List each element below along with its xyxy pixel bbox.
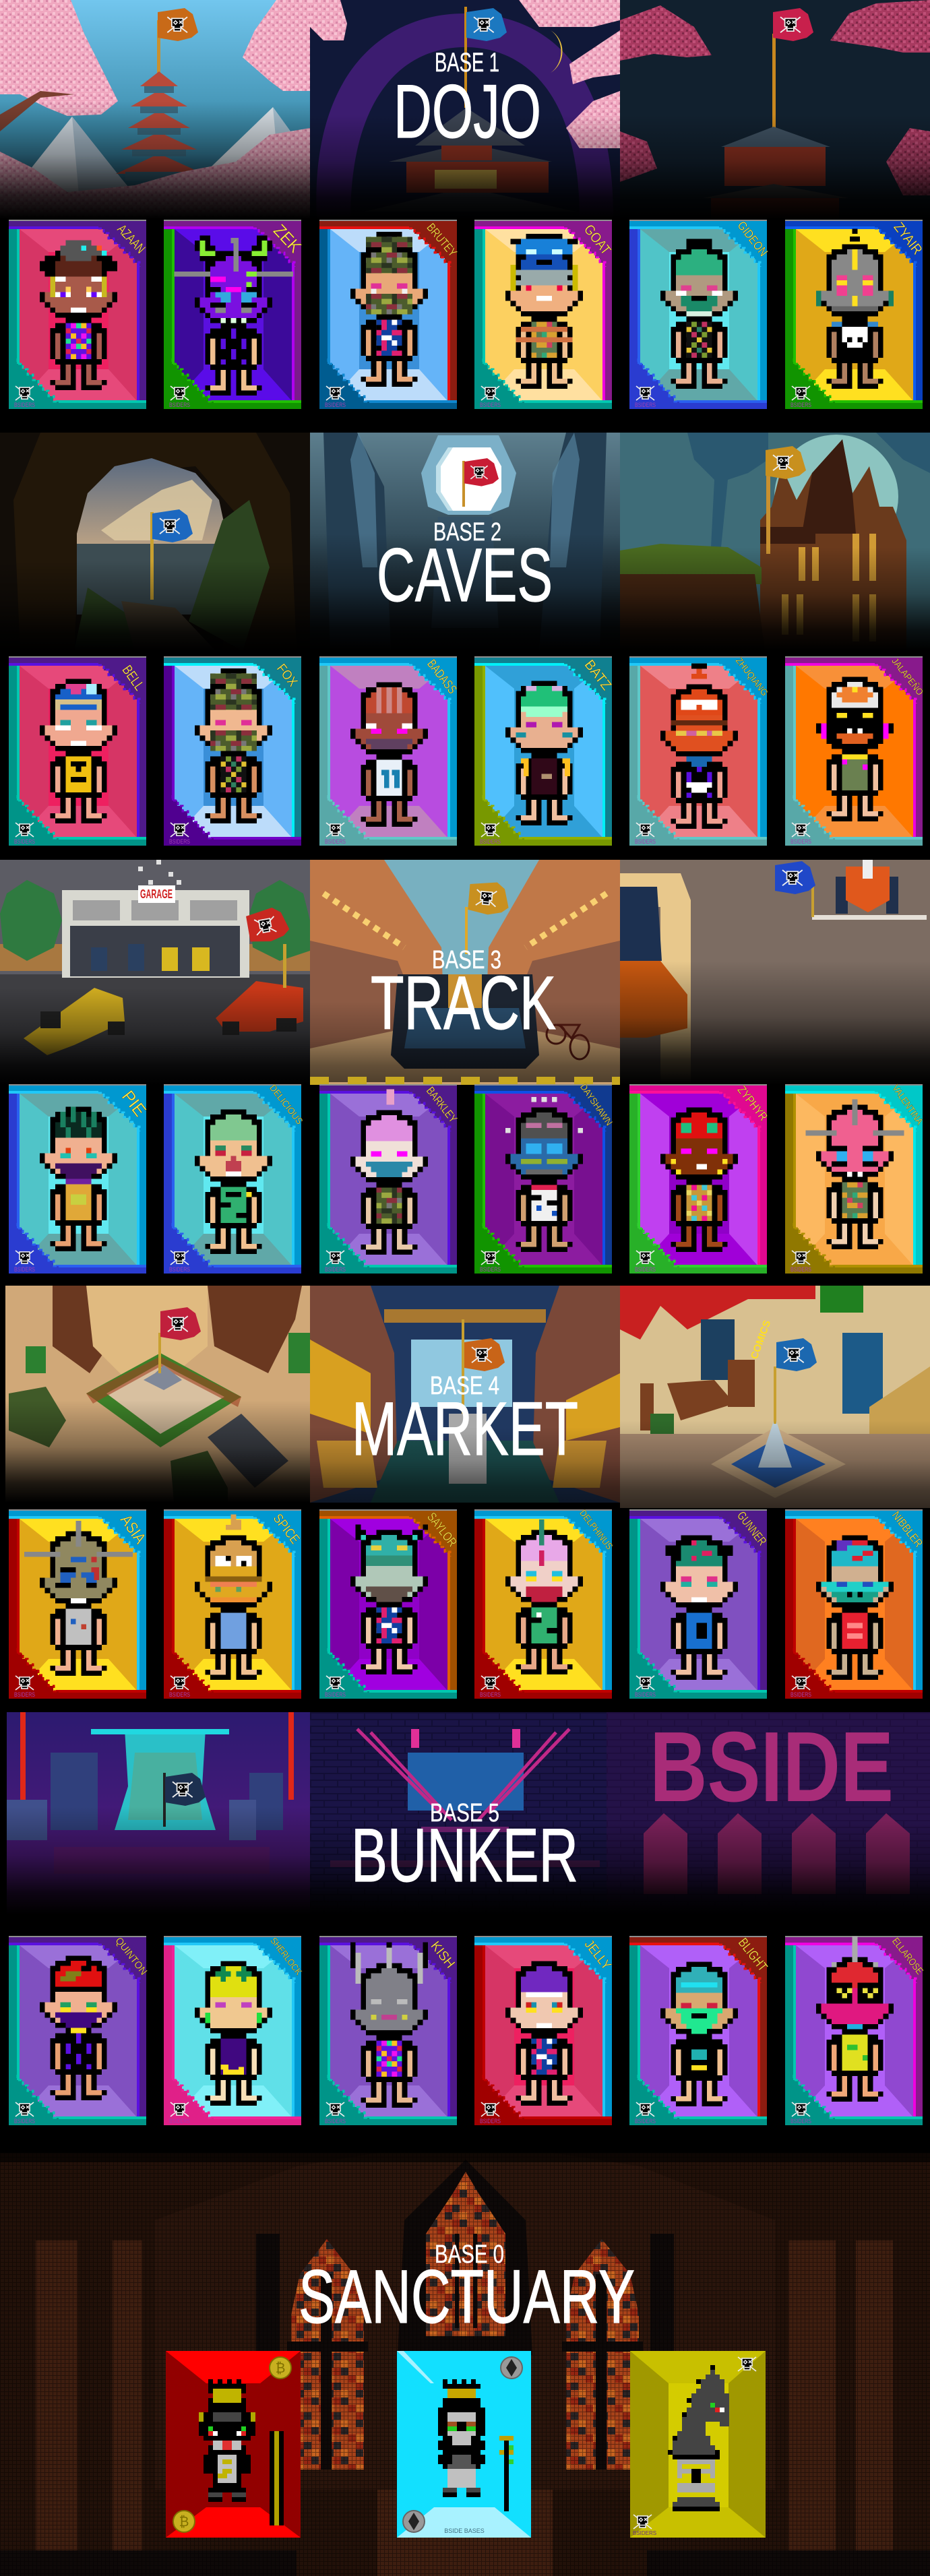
card: BLIGHT — [629, 1935, 770, 2125]
character: asia — [24, 1521, 133, 1676]
card: DELPHINUS — [474, 1507, 615, 1699]
card: SAYLOR: BSIDERS — [325, 1691, 346, 1698]
card: PIE: PIE — [118, 1086, 150, 1120]
card: GOAT: BSIDERS — [480, 402, 501, 408]
panel: base 0 sanctuary background — [0, 2153, 930, 2576]
character: valentina — [806, 1100, 904, 1249]
character: spice — [195, 1517, 272, 1680]
card: ZYAIR: ZYAIR — [890, 220, 925, 257]
card: SAYLOR: SAYLOR — [424, 1510, 459, 1550]
card: DAYSHAWN: DAYSHAWN — [578, 1081, 615, 1127]
character: delphinus — [505, 1519, 583, 1674]
title: bunker: BUNKER — [351, 1813, 578, 1897]
character: jelly — [505, 1961, 583, 2106]
icon: skull bottom — [633, 2515, 652, 2529]
title: sanctuary: SANCTUARY — [299, 2255, 635, 2339]
card: KISH — [319, 1936, 458, 2125]
card: GIDEON: GIDEON — [735, 219, 770, 259]
flag: yellow — [468, 880, 511, 916]
window: left — [291, 2239, 364, 2470]
panel: base 2 cave vault — [310, 433, 620, 636]
card: GIDEON: BSIDERS — [635, 402, 656, 408]
card: base 0 yellow knight — [630, 2351, 766, 2538]
title: market: MARKET — [352, 1387, 578, 1471]
title: dojo: DOJO — [394, 69, 541, 154]
card: KISH: KISH — [428, 1939, 458, 1971]
panel: base 2 cave mouth — [0, 433, 310, 637]
card: QUINTON — [9, 1935, 150, 2125]
coin: bitcoin top: ₿ — [276, 2360, 285, 2376]
card: DAYSHAWN: BSIDERS — [480, 1266, 501, 1273]
title: caves: CAVES — [377, 533, 553, 617]
card: BARKLEY: BARKLEY — [424, 1084, 460, 1125]
card: ZEK — [164, 220, 306, 409]
character: delicious — [195, 1109, 272, 1254]
title: base 3: BASE 3 — [432, 946, 501, 974]
character: chess knight — [668, 2368, 729, 2509]
card: ASIA: BSIDERS — [14, 1691, 35, 1698]
card: BATZ — [474, 656, 615, 846]
character: ethereum king — [438, 2381, 514, 2511]
character: gideon — [660, 242, 738, 389]
card: BADASS — [319, 656, 459, 846]
card: AZAAN: BSIDERS — [14, 402, 35, 408]
card: JELLY — [474, 1936, 614, 2125]
panel: base 4 cafe and fountain — [620, 1286, 930, 1508]
card: SAYLOR — [319, 1509, 459, 1699]
card: base 0 cyan ethereum king — [397, 2351, 531, 2538]
icon: skull top — [738, 2357, 756, 2371]
character: saylor — [350, 1528, 428, 1674]
character: fox — [195, 671, 272, 823]
card: JALAPEÑO: BSIDERS — [790, 838, 811, 845]
brand label: BSIDERS — [633, 2530, 656, 2536]
card: BLIGHT: BLIGHT — [735, 1935, 770, 1974]
flag: gold — [766, 446, 806, 479]
sign: garage: GARAGE — [140, 887, 173, 901]
character: bell — [40, 679, 117, 823]
card: SHERLOCK: SHERLOCK — [268, 1935, 305, 1977]
card: SHERLOCK: BSIDERS — [169, 2118, 190, 2125]
card: JELLY: BSIDERS — [480, 2118, 501, 2125]
character: kish — [350, 1943, 428, 2108]
flag: red — [773, 8, 813, 41]
card: PIE — [9, 1084, 150, 1274]
card: ZYPHYR: BSIDERS — [635, 1266, 656, 1273]
character: sherlock — [195, 1961, 272, 2106]
flag: crimson — [160, 1307, 201, 1340]
coin: bitcoin bottom: ₿ — [179, 2513, 189, 2530]
card: PIE: BSIDERS — [14, 1266, 35, 1273]
card: SPICE: BSIDERS — [169, 1691, 190, 1698]
panel: base 3 racetrack — [620, 860, 930, 1079]
panel: base 4 market corridor — [310, 1286, 620, 1503]
character: batz — [505, 681, 583, 825]
panel: base 5 brick hall — [310, 1712, 607, 1900]
card: ZHUQIANG: ZHUQIANG — [734, 655, 770, 698]
character: brutey — [350, 234, 428, 387]
card: FOX: FOX — [274, 661, 300, 689]
character: pie — [40, 1106, 117, 1251]
card: VALENTINA — [785, 1083, 925, 1274]
character: goat — [505, 237, 583, 389]
panel: base 5 bside wall — [607, 1711, 930, 1900]
card: NIBBLER: BSIDERS — [790, 1691, 811, 1698]
flag: orange — [158, 8, 198, 41]
card: BATZ: BATZ — [582, 657, 615, 693]
coin: bitcoin bottom — [173, 2511, 195, 2532]
flag: blue — [776, 1338, 817, 1371]
card: ASIA — [9, 1509, 149, 1699]
card: base 0 red bitcoin king — [166, 2351, 301, 2538]
character: nibbler — [816, 1535, 894, 1680]
flag: orange — [464, 1338, 505, 1371]
card: BELL: BSIDERS — [14, 838, 35, 845]
card: BADASS: BADASS — [424, 657, 459, 697]
panel: base 3 city street — [310, 860, 620, 1085]
card: VALENTINA: VALENTINA — [890, 1083, 925, 1127]
card: GUNNER: BSIDERS — [635, 1691, 656, 1698]
title: base 4: BASE 4 — [430, 1372, 499, 1400]
card: QUINTON: BSIDERS — [14, 2118, 35, 2125]
card: KISH: BSIDERS — [325, 2118, 346, 2125]
panel: base 5 neon arcade — [7, 1712, 310, 1906]
title: track: TRACK — [371, 961, 556, 1045]
card: GOAT: GOAT — [581, 222, 614, 258]
card: NIBBLER: NIBBLER — [890, 1509, 925, 1550]
card: FOX — [164, 656, 301, 846]
card: DELPHINUS: BSIDERS — [480, 1691, 501, 1698]
card: GUNNER — [629, 1509, 769, 1699]
card: ZYAIR — [785, 220, 925, 409]
card: ZYPHYR — [629, 1083, 770, 1274]
card: GIDEON — [629, 219, 770, 409]
coin: ethereum bottom — [403, 2511, 425, 2532]
coin: bitcoin top — [270, 2357, 291, 2379]
card: AZAAN — [9, 220, 148, 409]
card: QUINTON: QUINTON — [113, 1935, 150, 1977]
card: GUNNER: GUNNER — [735, 1509, 769, 1548]
character: barkley — [350, 1092, 428, 1255]
card: ZHUQIANG — [629, 655, 770, 846]
character: ellarose — [816, 1937, 894, 2102]
card: DELICIOUS: BSIDERS — [169, 1266, 190, 1273]
coin: ethereum top — [501, 2357, 522, 2379]
card: DELICIOUS: DELICIOUS — [268, 1082, 305, 1126]
card: BADASS: BSIDERS — [325, 838, 346, 845]
card: ZYAIR: BSIDERS — [790, 402, 811, 408]
card: DAYSHAWN — [474, 1081, 615, 1274]
character: gunner — [660, 1535, 738, 1680]
card: AZAAN: AZAAN — [114, 222, 148, 257]
card: SHERLOCK — [164, 1935, 305, 2125]
panel: base 1 dojo dark sky temple — [620, 0, 930, 210]
card: BRUTEY: BRUTEY — [424, 221, 460, 259]
card: ASIA: ASIA — [117, 1511, 149, 1547]
character: bitcoin king — [199, 2381, 282, 2525]
character: azaan — [40, 243, 117, 390]
character: zyphyr — [660, 1107, 738, 1252]
flag: blue — [466, 8, 507, 41]
flag: red — [464, 458, 499, 486]
character: badass — [350, 682, 428, 827]
flag: blue — [152, 509, 193, 542]
panel: base 1 dojo night temple — [310, 0, 620, 209]
card: ELLAROSE: BSIDERS — [790, 2118, 811, 2125]
card: ZYPHYR: ZYPHYR — [735, 1083, 770, 1123]
card: BRUTEY: BSIDERS — [325, 402, 346, 408]
card: JELLY: JELLY — [582, 1937, 614, 1973]
card: DELICIOUS — [164, 1082, 305, 1274]
card: SPICE: SPICE — [270, 1511, 303, 1547]
title: base 5: BASE 5 — [430, 1799, 499, 1827]
flag: blue — [775, 861, 815, 894]
character: zek — [174, 238, 293, 396]
title: base 0: BASE 0 — [435, 2240, 504, 2269]
caption: bside bases: BSIDE BASES — [444, 2527, 485, 2534]
card: ZEK: ZEK — [270, 220, 306, 257]
title: base 2: BASE 2 — [433, 518, 501, 546]
card: ELLAROSE — [785, 1936, 925, 2125]
panel: base 4 plaza — [5, 1286, 310, 1497]
card: BELL: BELL — [119, 662, 147, 693]
flag: dark — [165, 1773, 206, 1806]
card: VALENTINA: BSIDERS — [790, 1266, 811, 1273]
character: zyair — [816, 231, 894, 389]
character: quinton — [40, 1955, 117, 2100]
card: NIBBLER — [785, 1509, 925, 1699]
window: center — [426, 2172, 505, 2336]
card: BARKLEY — [319, 1084, 460, 1274]
character: jalapeno — [816, 677, 894, 821]
card: JALAPEÑO — [785, 656, 926, 846]
character: zhuqiang — [660, 666, 738, 829]
character: blight — [660, 1961, 738, 2106]
card: SPICE — [164, 1509, 303, 1699]
card: JALAPEÑO: JALAPEÑO — [890, 656, 926, 697]
card: BELL — [9, 656, 147, 846]
panel: base 1 dojo daytime pagoda — [0, 0, 310, 214]
character: dayshawn — [505, 1100, 583, 1252]
card: GOAT — [474, 220, 614, 409]
card: DELPHINUS: DELPHINUS — [578, 1507, 615, 1551]
card: ZHUQIANG: BSIDERS — [635, 838, 656, 845]
card: ZEK: BSIDERS — [169, 402, 190, 408]
card: BARKLEY: BSIDERS — [325, 1266, 346, 1273]
panel: base 3 garage — [0, 860, 310, 1069]
flag: red — [245, 906, 291, 945]
card: BRUTEY — [319, 220, 460, 409]
window: right — [566, 2239, 639, 2470]
sign: comics: COMICS — [749, 1319, 773, 1360]
card: FOX: BSIDERS — [169, 838, 190, 845]
card: BLIGHT: BSIDERS — [635, 2118, 656, 2125]
card: BATZ: BSIDERS — [480, 838, 501, 845]
panel: base 2 castle — [620, 433, 930, 641]
title: base 1: BASE 1 — [435, 48, 499, 77]
